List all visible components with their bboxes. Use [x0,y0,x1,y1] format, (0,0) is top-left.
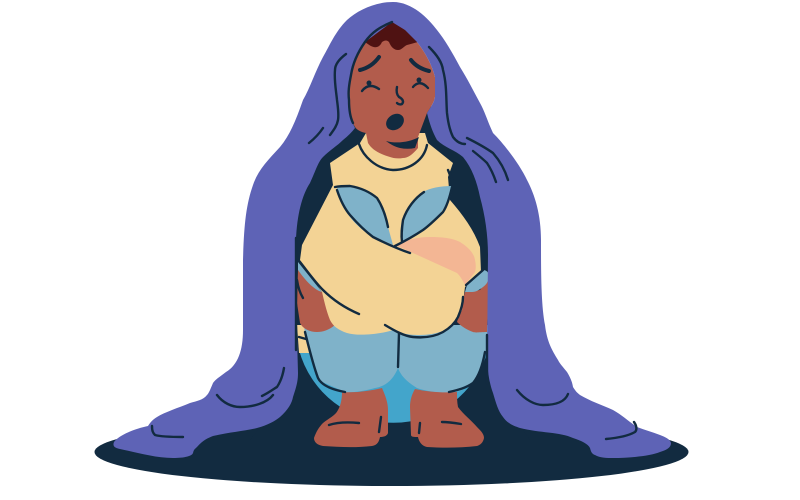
blue sleeve panels [337,186,452,245]
eyebrows [360,57,429,71]
eye dots [366,78,422,86]
feet [314,388,484,448]
dark blanket interior [250,105,530,440]
sleeve cuffs [298,262,489,292]
blanket [113,2,671,458]
blue backdrop circle [299,350,488,423]
peach elbow [395,237,476,285]
cream sock stripe [297,325,310,353]
hair [365,21,418,50]
nose [397,87,403,104]
chin shadow [386,137,419,149]
closed eyes [362,83,428,91]
ground shadow [94,418,688,486]
face features [359,57,429,170]
collar line [359,144,427,170]
clothing outlines [296,170,487,433]
blanket fold lines [152,22,636,439]
sweater torso and arms [300,133,481,335]
head [349,22,435,158]
jeans [304,325,488,393]
open mouth [383,110,407,134]
knees [297,270,489,332]
